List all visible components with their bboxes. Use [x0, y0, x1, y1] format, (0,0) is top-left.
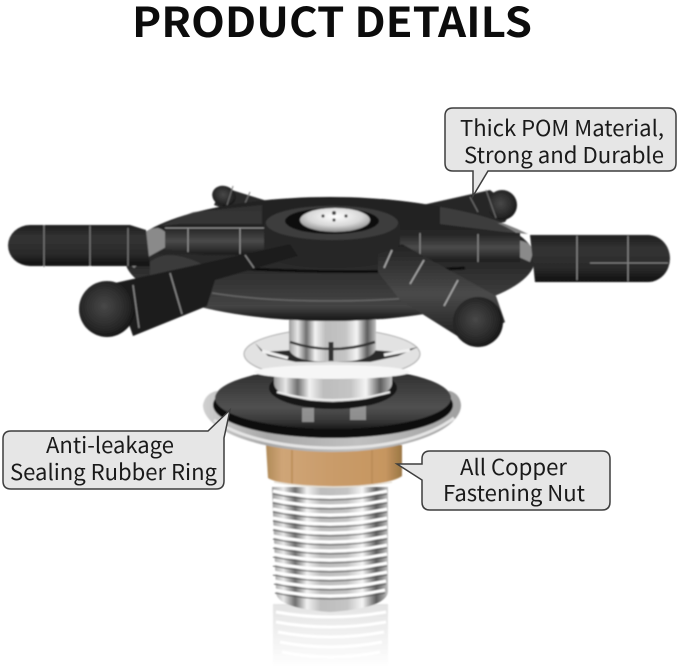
callout: thick POM material: Thick POM Material,	[460, 111, 664, 143]
threaded pipe	[272, 487, 388, 612]
chrome dome	[300, 208, 370, 232]
silver base plate	[203, 391, 461, 452]
handle: front right	[378, 244, 505, 347]
ship wheel handle	[8, 182, 670, 347]
chrome stem	[289, 315, 376, 362]
callout: sealing rubber ring	[3, 410, 230, 489]
threaded pipe reflection	[273, 604, 388, 667]
callout: thick POM material	[445, 108, 676, 196]
handle: front left	[79, 244, 298, 337]
product: drain fitting with ship wheel handle	[8, 182, 670, 667]
handle: right	[398, 233, 670, 282]
black sealing gasket	[213, 367, 453, 438]
wheel rim	[125, 197, 535, 321]
chrome collar	[269, 367, 397, 409]
hub	[264, 205, 400, 268]
chrome flange	[244, 329, 420, 379]
handle: back right	[400, 190, 517, 238]
callout: copper fastening nut: Fastening Nut	[443, 476, 585, 508]
callout: copper fastening nut	[397, 450, 610, 510]
handle: left	[8, 225, 270, 267]
callout: thick POM material: Strong and Durable	[464, 138, 664, 170]
callout: copper fastening nut: All Copper	[460, 450, 567, 482]
callout: sealing rubber ring: Sealing Rubber Ring	[10, 455, 218, 487]
callout: sealing rubber ring: Anti-leakage	[46, 428, 174, 460]
handle: back left	[209, 182, 296, 232]
copper nut	[266, 445, 402, 487]
